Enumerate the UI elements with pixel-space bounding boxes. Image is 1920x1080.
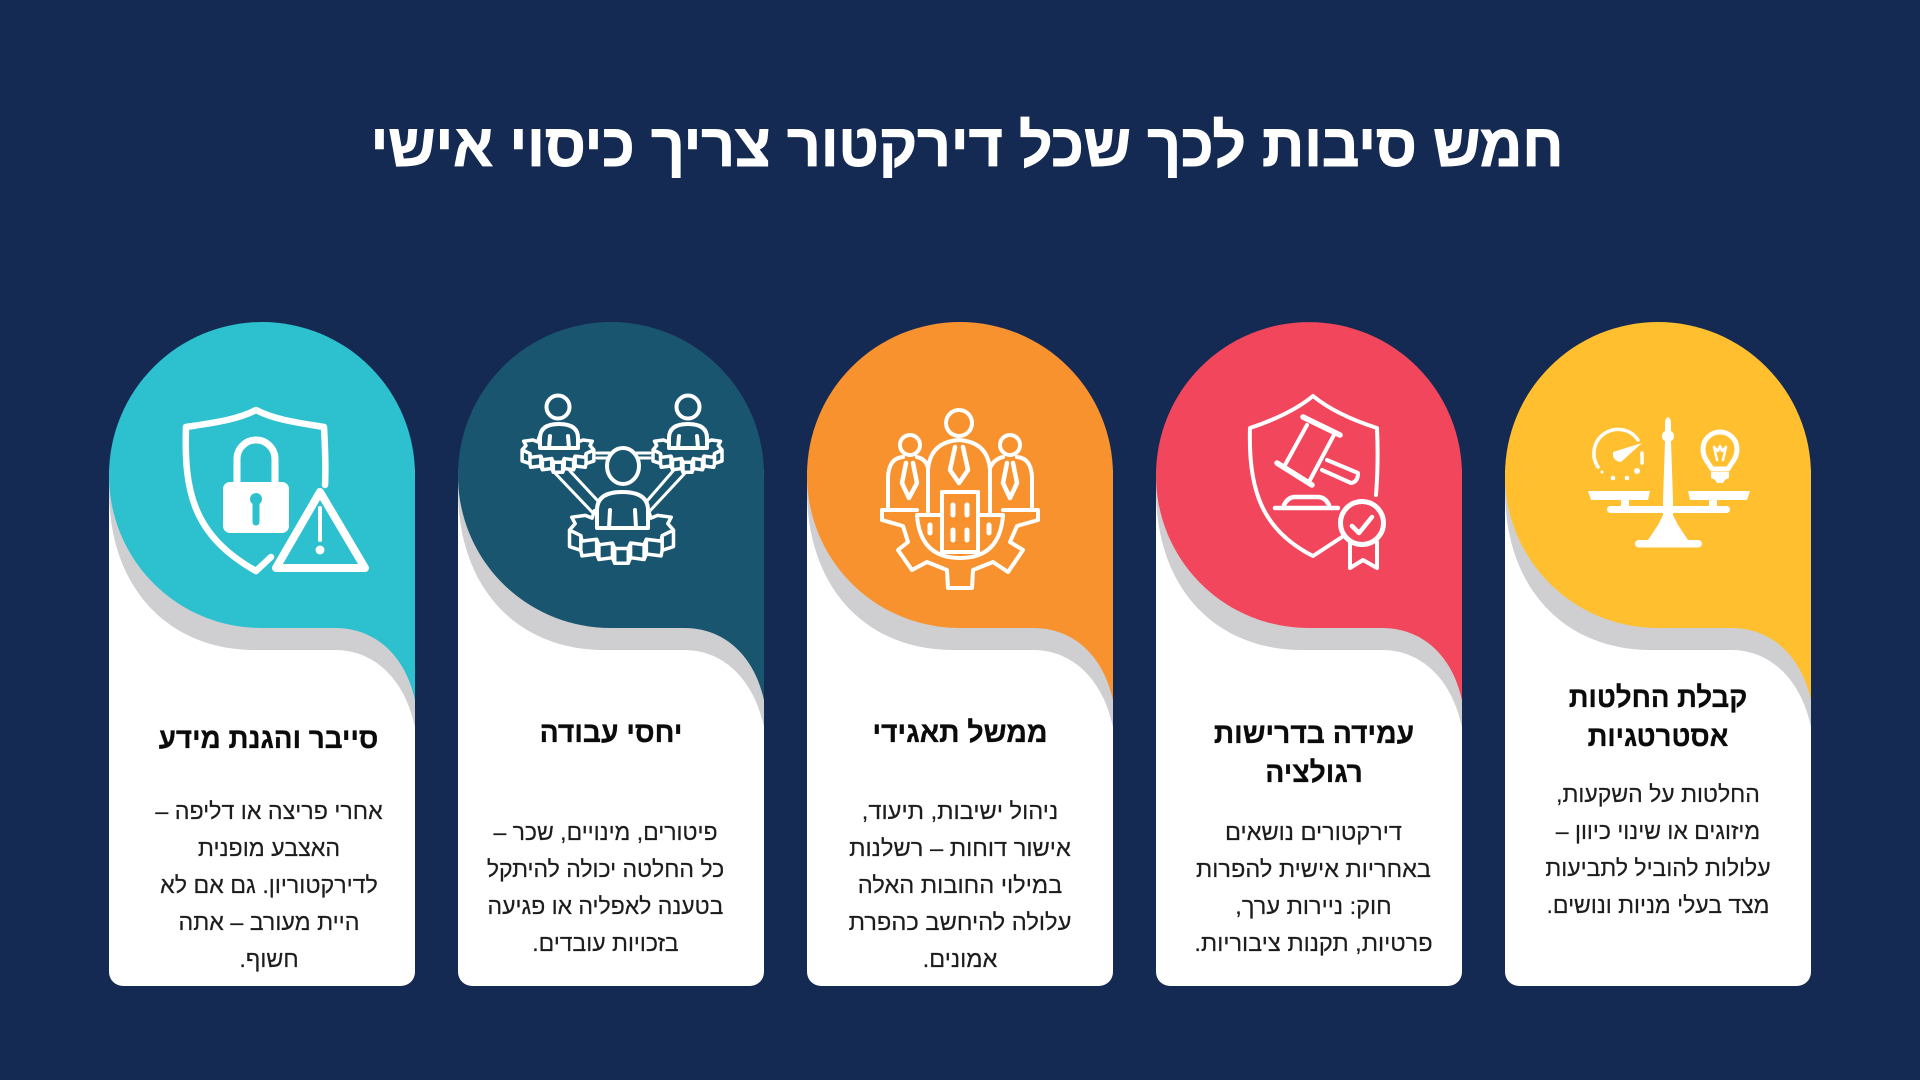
body text <box>1194 819 1433 956</box>
card body <box>458 470 764 986</box>
card body <box>1505 470 1811 986</box>
card body <box>807 470 1113 986</box>
body text <box>1545 781 1771 918</box>
body text: חשוף. <box>239 946 299 972</box>
panel: cyber and data protection <box>109 322 415 986</box>
heading: רגולציה <box>1265 757 1363 789</box>
card shadow <box>1156 470 1462 727</box>
card colour head <box>807 322 1113 700</box>
heading <box>1214 718 1414 789</box>
body text: אישור דוחות – רשלנות <box>849 835 1071 861</box>
body text: אמונים. <box>923 946 997 972</box>
card body <box>1156 470 1462 986</box>
heading <box>1569 682 1747 753</box>
card colour head <box>1505 322 1811 700</box>
body text: פיטורים, מינויים, שכר – <box>493 819 718 845</box>
body text: האצבע מופנית <box>198 835 340 861</box>
body text: דירקטורים נושאים <box>1225 819 1402 845</box>
body text: בטענה לאפליה או פגיעה <box>488 893 723 919</box>
body text: ניהול ישיבות, תיעוד, <box>862 798 1058 824</box>
panel: corporate governance <box>807 322 1113 986</box>
panel: labour relations <box>458 322 764 986</box>
card colour head <box>109 322 415 700</box>
card shadow <box>109 470 415 727</box>
body text: כל החלטה יכולה להיתקל <box>487 856 724 882</box>
body text: חוק: ניירות ערך, <box>1235 893 1392 919</box>
heading: יחסי עבודה <box>540 717 682 749</box>
body text: עלולות להוביל לתביעות <box>1545 855 1771 881</box>
body text <box>155 798 383 972</box>
body text <box>849 798 1071 972</box>
body text <box>487 819 724 956</box>
icon: shield lock warning <box>186 410 365 571</box>
body text: עלולה להיחשב כהפרת <box>849 909 1071 935</box>
card shadow <box>807 470 1113 727</box>
icon: people on gears <box>522 396 722 563</box>
body text: לדירקטוריון. גם אם לא <box>160 872 378 898</box>
body text: מיזוגים או שינוי כיוון – <box>1556 818 1760 844</box>
heading: ממשל תאגידי <box>872 717 1048 749</box>
body text: במילוי החובות האלה <box>858 872 1062 898</box>
card shadow <box>1505 470 1811 727</box>
icon: scale gauge bulb <box>1588 417 1750 548</box>
body text: פרטיות, תקנות ציבוריות. <box>1194 930 1433 956</box>
heading: עמידה בדרישות <box>1214 718 1414 750</box>
body text: החלטות על השקעות, <box>1556 781 1760 807</box>
body text: אחרי פריצה או דליפה – <box>155 798 383 824</box>
icon: board and gear <box>882 410 1038 588</box>
icon: shield gavel badge <box>1250 396 1384 568</box>
body text: בזכויות עובדים. <box>532 930 679 956</box>
body text: מצד בעלי מניות ונושים. <box>1547 892 1769 918</box>
card shadow <box>458 470 764 727</box>
card body <box>109 470 415 986</box>
title: חמש סיבות לכך שכל דירקטור צריך כיסוי אישי <box>371 112 1563 179</box>
heading: קבלת החלטות <box>1569 682 1747 714</box>
heading: אסטרטגיות <box>1588 721 1728 753</box>
heading: סייבר והגנת מידע <box>159 723 378 755</box>
body text: היית מעורב – אתה <box>179 909 359 935</box>
body text: באחריות אישית להפרות <box>1196 856 1431 882</box>
panel: regulatory compliance <box>1156 322 1462 986</box>
panel: strategic decisions <box>1505 322 1811 986</box>
card colour head <box>458 322 764 700</box>
card colour head <box>1156 322 1462 700</box>
